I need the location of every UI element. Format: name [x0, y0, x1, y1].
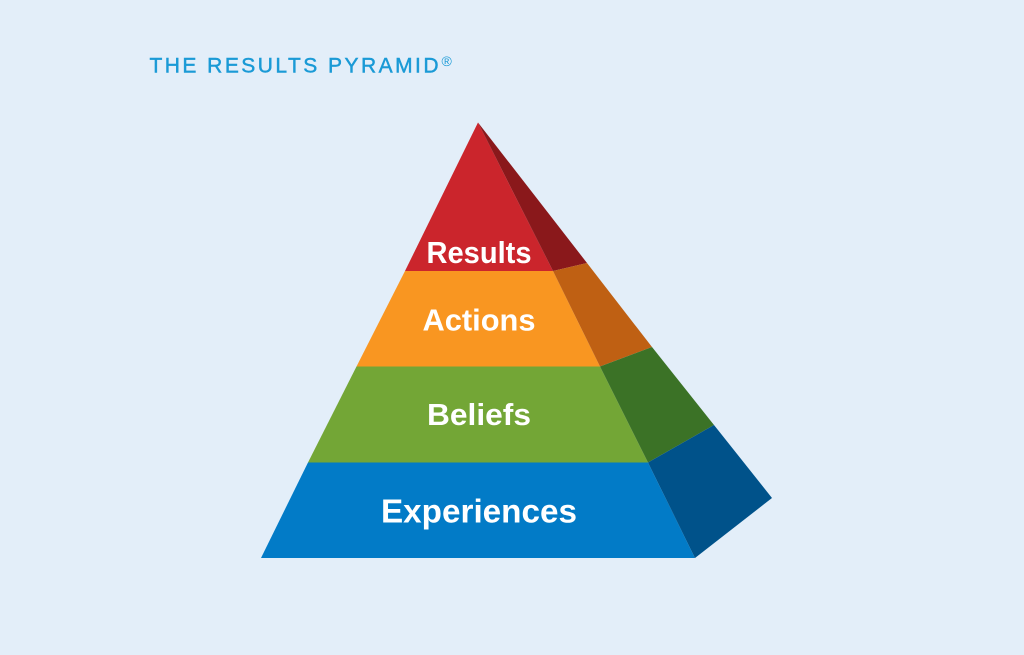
pyramid — [261, 122, 772, 558]
tier: experiences: Experiences — [381, 492, 577, 530]
tier: experiences — [261, 425, 772, 558]
tier: actions — [356, 263, 652, 366]
title: ® — [442, 53, 452, 69]
title: THE RESULTS PYRAMID — [150, 54, 438, 77]
tier: beliefs — [308, 347, 714, 462]
tier: actions: Actions — [422, 303, 536, 338]
tier: beliefs: Beliefs — [427, 397, 531, 432]
tier: results: Results — [426, 235, 532, 270]
tier: results — [405, 122, 587, 271]
